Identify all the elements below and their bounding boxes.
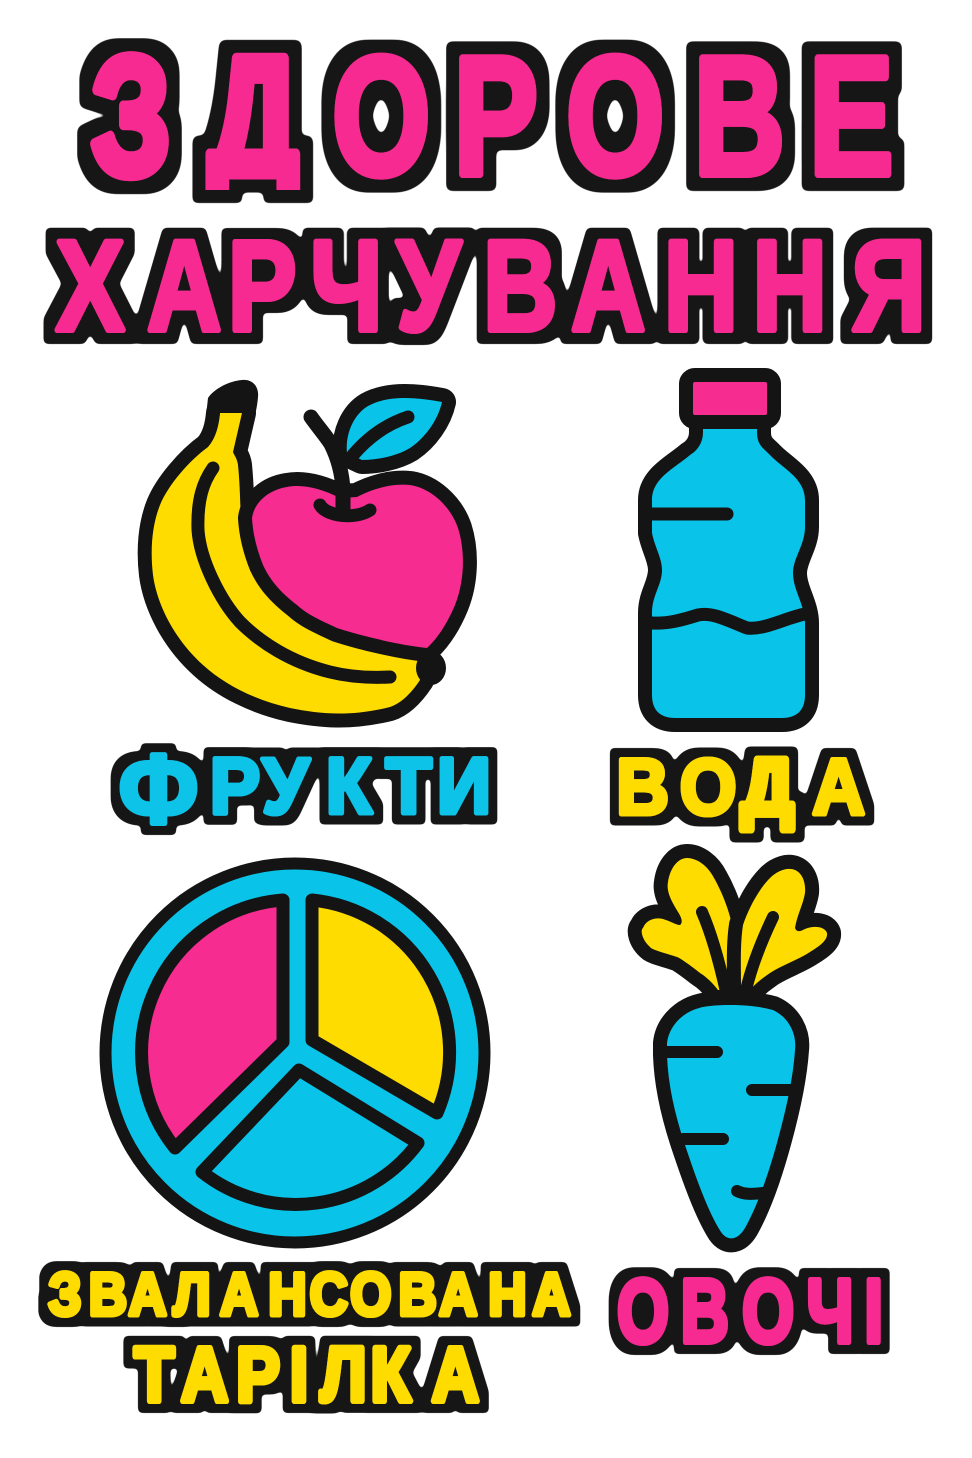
- label: fruits: Ф: [119, 735, 198, 845]
- banana ridge: [198, 468, 390, 677]
- banana stem: [206, 380, 258, 428]
- apple dimple: [320, 505, 370, 516]
- carrot marks: [667, 1052, 790, 1194]
- label: fruits: РУКТИ: [210, 742, 491, 830]
- left leaf: [642, 858, 733, 990]
- label: water: [616, 743, 865, 832]
- apple body: [252, 485, 463, 648]
- bottle body: [652, 420, 805, 718]
- label: water: Д: [742, 743, 793, 832]
- title: line 2: ХАРЧУВАННЯ: [56, 214, 926, 358]
- icon: carrot: [642, 858, 827, 1238]
- label: fruits: [119, 735, 491, 845]
- plate rim: [106, 864, 484, 1242]
- bottle highlight line: [652, 508, 727, 520]
- label: balanced plate line 1: ЗВАЛАНСОВАНА: [48, 1261, 571, 1328]
- leaf vein left: [702, 912, 726, 992]
- icon: balanced plate: [106, 864, 484, 1242]
- label: balanced plate line 2: ТАРІЛКА: [134, 1332, 479, 1418]
- banana tip: [416, 651, 446, 685]
- leaf vein right: [746, 917, 773, 990]
- cyan section: [202, 1070, 418, 1204]
- carrot body: [667, 1005, 795, 1238]
- leaf vein: [353, 417, 408, 455]
- label: vegetables: ОВОЧІ: [617, 1260, 883, 1361]
- water level: [652, 614, 805, 628]
- apple leaf: [347, 398, 442, 460]
- title: line 1: ЗД: [92, 24, 298, 210]
- title: line 1: ОРОВЕ: [332, 24, 893, 210]
- bottle cap: [693, 382, 767, 415]
- label: water: ВО: [616, 743, 736, 832]
- pink section: [142, 900, 283, 1148]
- label: water: А: [812, 743, 865, 832]
- yellow section: [312, 900, 450, 1113]
- apple stem: [311, 417, 343, 512]
- title: line 1: [92, 24, 893, 210]
- icon: water bottle: [652, 382, 805, 718]
- banana: [152, 413, 420, 714]
- right leaf: [741, 869, 827, 990]
- icon: banana and apple: [152, 380, 463, 714]
